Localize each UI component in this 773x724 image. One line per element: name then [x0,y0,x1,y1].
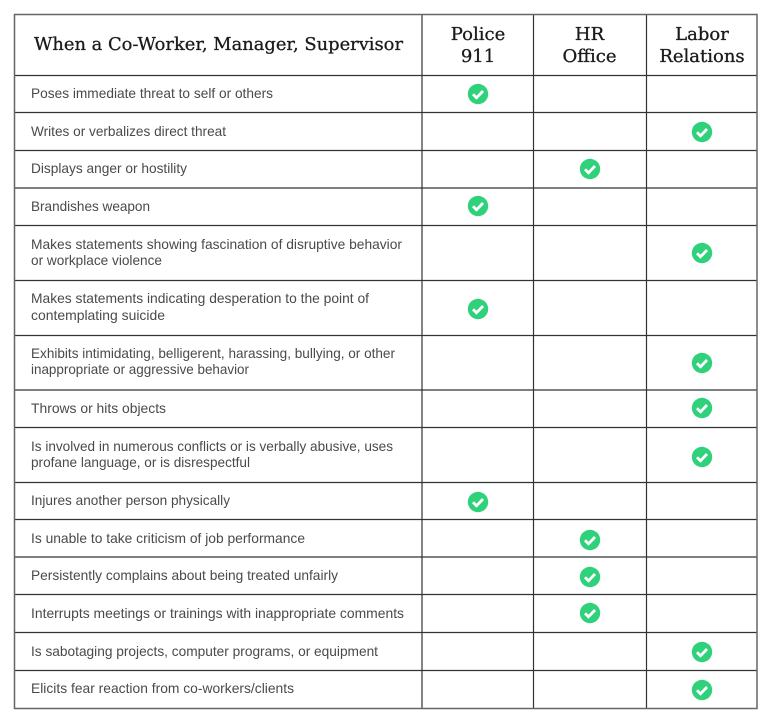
heading: Police 911: 911 [461,46,495,67]
row labels: profane language, or is disrespectful [31,454,250,470]
heading: Labor Relations: Relations [659,46,745,67]
heading: HR Office: HR [575,24,605,45]
heading: HR Office: Office [562,46,617,67]
row labels: Is sabotaging projects, computer programs, or equipment [31,643,378,659]
row labels: Displays anger or hostility [31,160,187,176]
row labels: Brandishes weapon [31,198,150,214]
heading: first column: When a Co-Worker, Manager, Supervisor [34,34,403,55]
row labels: Poses immediate threat to self or others [31,85,273,101]
row labels: Is involved in numerous conflicts or is verbally abusive, uses [31,438,393,454]
check marks [468,84,712,700]
row labels: Injures another person physically [31,492,230,508]
row labels: Makes statements indicating desperation to the point of [31,290,369,306]
row labels: Writes or verbalizes direct threat [31,123,226,139]
row labels: Persistently complains about being treated unfairly [31,567,338,583]
row labels: Makes statements showing fascination of disruptive behavior [31,236,402,252]
heading: Labor Relations: Labor [675,24,729,45]
row labels: contemplating suicide [31,307,165,323]
row labels: inappropriate or aggressive behavior [31,361,249,377]
row labels: Elicits fear reaction from co-workers/clients [31,680,294,696]
row labels [31,85,404,696]
row labels: Is unable to take criticism of job performance [31,530,305,546]
row labels: Throws or hits objects [31,400,166,416]
heading: Police 911: Police [451,24,505,45]
row labels: or workplace violence [31,252,162,268]
header row [34,24,745,67]
row labels: Interrupts meetings or trainings with inappropriate comments [31,605,404,621]
row labels: Exhibits intimidating, belligerent, harassing, bullying, or other [31,345,395,361]
